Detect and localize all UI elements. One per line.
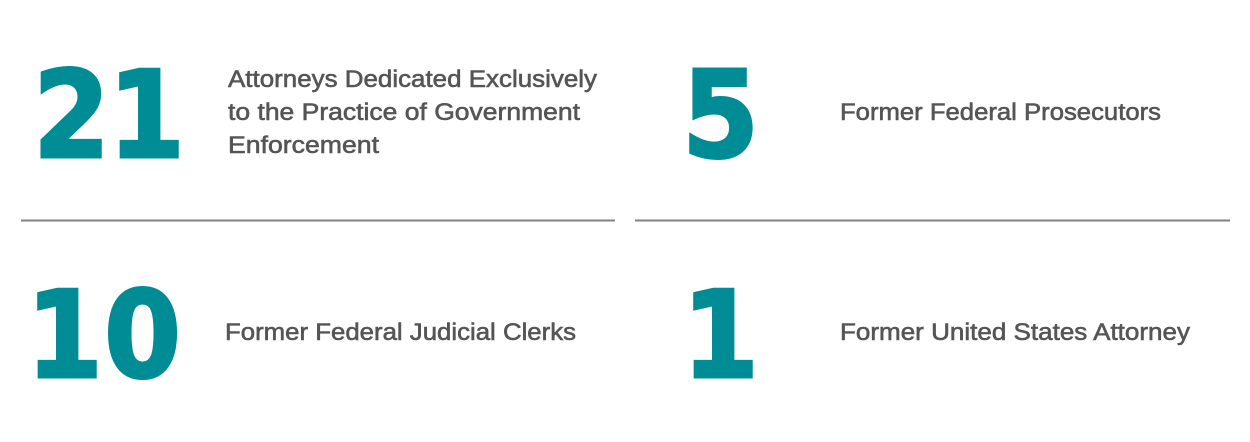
number 10: 0 bbox=[104, 267, 181, 406]
stat: 10 clerks bbox=[26, 267, 576, 406]
stat: 21 attorneys bbox=[33, 47, 598, 186]
label: federal prosecutors: Former Federal Prosecutors bbox=[840, 99, 1161, 126]
number 21: 1 bbox=[108, 47, 185, 186]
stat: 5 prosecutors bbox=[682, 47, 1161, 186]
label: attorneys dedicated: Enforcement bbox=[228, 132, 379, 159]
divider right bbox=[635, 220, 1230, 222]
label: judicial clerks: Former Federal Judicial Clerks bbox=[225, 319, 576, 346]
number 10: 1 bbox=[26, 267, 103, 406]
number 10 bbox=[26, 267, 181, 406]
stat: 1 attorney bbox=[682, 267, 1191, 406]
number 1: 1 bbox=[682, 267, 759, 406]
label: attorneys dedicated: Attorneys Dedicated Exclusively bbox=[228, 66, 598, 93]
label: attorneys dedicated bbox=[228, 66, 598, 159]
label: US attorney: Former United States Attorney bbox=[840, 319, 1191, 346]
number 5: 5 bbox=[682, 47, 759, 186]
label: attorneys dedicated: to the Practice of Government bbox=[228, 99, 580, 126]
number 21: 2 bbox=[33, 47, 110, 186]
divider left bbox=[21, 220, 615, 222]
number 21 bbox=[33, 47, 185, 186]
